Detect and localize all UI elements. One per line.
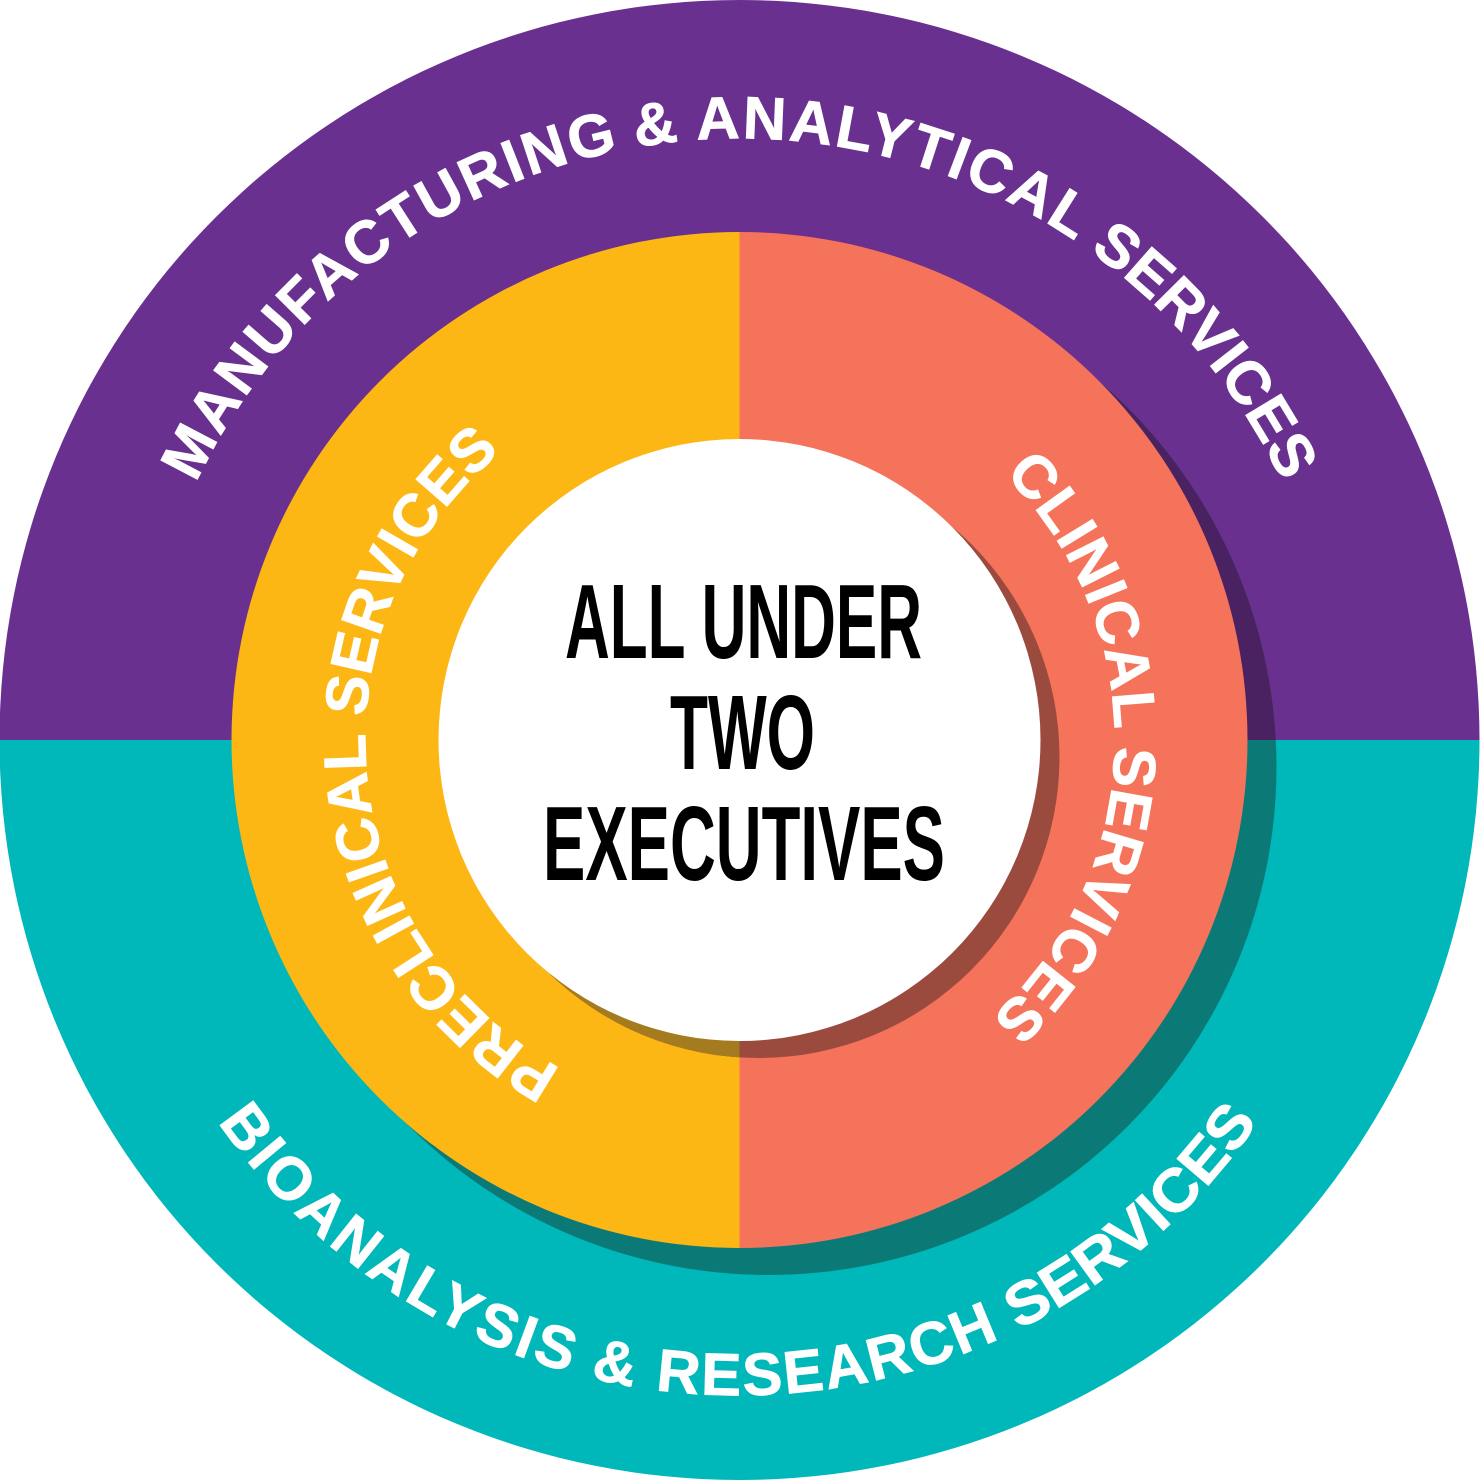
label: clinical services: CLINICAL SERVICES xyxy=(998,454,1156,1041)
center heading xyxy=(543,563,945,903)
inner circle shadow on coral xyxy=(458,456,1060,1058)
center white circle xyxy=(438,439,1040,1041)
outer ring bottom: teal half xyxy=(0,740,1480,1480)
center heading: ALL UNDER xyxy=(565,563,922,681)
label: bioanalysis and research services: BIOANALYSIS & RESEARCH SERVICES xyxy=(220,1100,1252,1396)
middle ring: right coral half xyxy=(740,232,1247,1248)
middle ring shadow on purple xyxy=(1100,382,1276,740)
middle ring shadow on teal xyxy=(407,381,1276,1275)
label: manufacturing and analytical services: MANUFACTURING & ANALYTICAL SERVICES xyxy=(160,96,1315,480)
label: preclinical services: PRECLINICAL SERVICES xyxy=(324,428,558,1103)
middle ring: left yellow half xyxy=(231,232,739,1248)
center heading: EXECUTIVES xyxy=(543,785,945,903)
center heading: TWO xyxy=(670,674,815,792)
outer ring top: purple half xyxy=(0,0,1480,740)
inner circle shadow on yellow xyxy=(549,973,740,1058)
